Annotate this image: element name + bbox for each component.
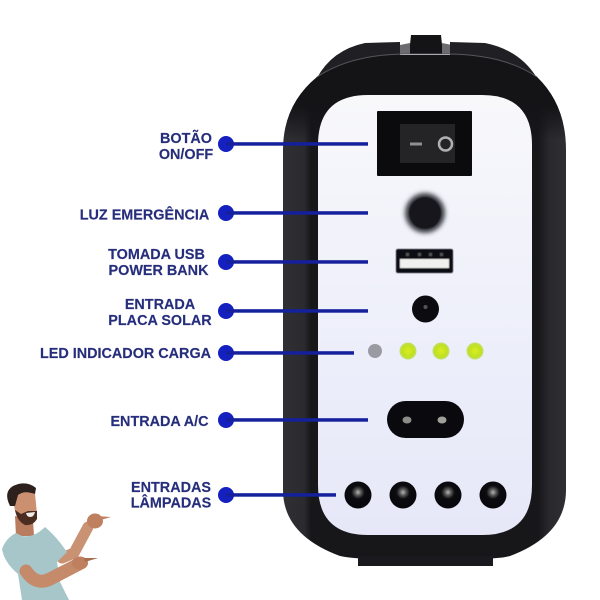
lamp port 4 bbox=[480, 482, 506, 508]
callout: luz emergência bbox=[80, 205, 368, 224]
front hand bbox=[72, 556, 88, 570]
outer casing bbox=[283, 55, 566, 559]
raised finger bbox=[96, 516, 111, 521]
lamp port 3 bbox=[434, 482, 462, 508]
callout: entrada a/c bbox=[110, 412, 368, 430]
lamp port 2 bbox=[390, 482, 416, 508]
callout: tomada usb: POWER BANK bbox=[109, 263, 209, 279]
callout: botão on/off: ON/OFF bbox=[159, 147, 213, 163]
usb port bbox=[396, 249, 453, 273]
smile bbox=[26, 512, 35, 517]
base foot bbox=[358, 556, 493, 566]
casing top shade bbox=[283, 55, 566, 150]
rear shell bbox=[317, 42, 537, 78]
green led 1 bbox=[400, 342, 416, 360]
callout: led indicador carga: LED INDICADOR CARGA bbox=[40, 346, 212, 362]
raised arm bbox=[62, 527, 88, 558]
front arm bbox=[26, 564, 79, 581]
callout: botão on/off bbox=[159, 129, 368, 163]
callout: botão on/off: BOTÃO bbox=[160, 129, 212, 147]
beard bbox=[15, 510, 37, 525]
grey led bbox=[368, 344, 382, 358]
neck bbox=[15, 516, 34, 536]
device: battery unit bbox=[283, 35, 566, 566]
callout: luz emergência: LUZ EMERGÊNCIA bbox=[80, 206, 210, 224]
green led 2 bbox=[432, 342, 450, 360]
callout: entrada placa solar: PLACA SOLAR bbox=[108, 313, 212, 329]
emergency light button bbox=[405, 193, 445, 233]
green led 3 bbox=[466, 342, 484, 360]
on/off switch bbox=[377, 111, 472, 176]
solar input bbox=[412, 296, 439, 322]
man pointing bbox=[2, 483, 111, 600]
callout: tomada usb: TOMADA USB bbox=[108, 247, 205, 263]
callout: entradas lâmpadas bbox=[131, 480, 336, 512]
hair bbox=[7, 483, 36, 506]
handle mounts bbox=[397, 43, 455, 54]
front finger bbox=[84, 558, 98, 562]
callout: entradas lâmpadas: ENTRADAS bbox=[131, 480, 211, 496]
callout: led indicador carga bbox=[40, 345, 354, 362]
callout: entrada placa solar bbox=[108, 297, 368, 329]
ac inlet bbox=[387, 401, 464, 438]
handle clip bbox=[409, 35, 443, 54]
callout: entrada placa solar: ENTRADA bbox=[125, 297, 196, 313]
casing highlight bbox=[317, 54, 537, 77]
white panel bbox=[318, 95, 532, 535]
shirt bbox=[2, 527, 69, 600]
callout: entradas lâmpadas: LÂMPADAS bbox=[131, 494, 212, 512]
lamp port 1 bbox=[344, 482, 372, 508]
callout: entrada a/c: ENTRADA A/C bbox=[110, 414, 209, 430]
raised hand bbox=[87, 514, 103, 528]
face bbox=[14, 491, 37, 525]
callout: tomada usb bbox=[108, 247, 368, 279]
